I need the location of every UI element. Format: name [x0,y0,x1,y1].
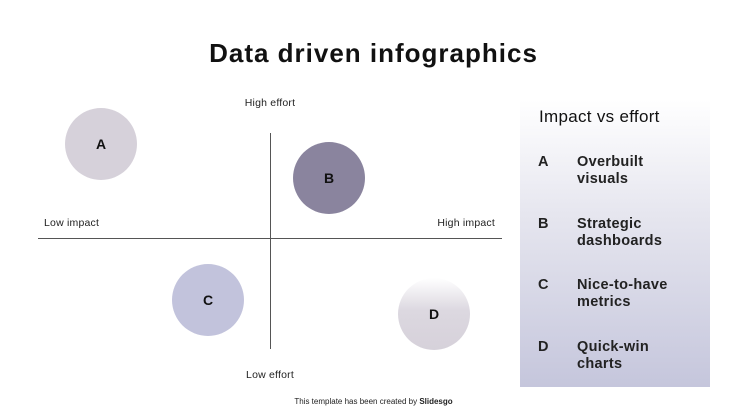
legend panel: dashboards [577,233,662,249]
label: low effort: Low effort [246,369,294,381]
circle C [172,264,244,336]
matrix chart [38,97,502,381]
circle D: D [429,306,439,322]
legend panel: Nice-to-have [577,277,668,293]
footer credit: This template has been created by Slidesgo [294,397,453,406]
legend heading: Impact vs effort [539,107,660,126]
item B [538,216,662,249]
circle A [65,108,137,180]
item C [538,277,668,310]
circle C: C [203,292,213,308]
legend panel: Strategic [577,216,642,232]
item D [538,339,649,372]
vertical axis [270,133,271,349]
label: high impact: High impact [437,217,495,229]
horizontal axis [38,238,502,239]
legend panel [520,100,710,387]
legend panel: metrics [577,294,631,310]
item C: C [538,277,549,293]
legend panel: Quick-win [577,339,649,355]
item A: A [538,154,549,170]
item A [538,154,643,187]
circle D [398,278,470,350]
title: Data driven infographics [209,38,538,68]
label: high effort: High effort [245,97,295,109]
legend panel: Overbuilt [577,154,643,170]
circle A: A [96,136,106,152]
legend panel: visuals [577,171,628,187]
item B: B [538,216,549,232]
item D: D [538,339,549,355]
circle B [293,142,365,214]
label: low impact: Low impact [44,217,99,229]
circle B: B [324,170,334,186]
legend panel: charts [577,356,622,372]
